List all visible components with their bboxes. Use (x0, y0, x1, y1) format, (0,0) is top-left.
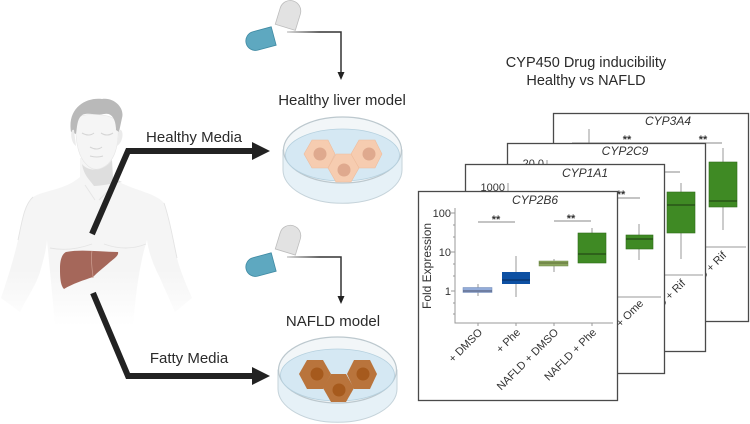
y tick labels (433, 208, 451, 298)
x tick labels: NAFLD + DMSO (495, 326, 561, 393)
axes (451, 208, 613, 326)
arrow: healthy media (92, 142, 270, 234)
box: NAFLD Phe (578, 228, 606, 263)
x tick labels: NAFLD + Phe (542, 327, 599, 383)
title: CYP2B6 (512, 193, 558, 207)
cell centre (328, 154, 359, 182)
x tick labels (447, 326, 599, 393)
cell right (351, 140, 382, 168)
petri dish: healthy (283, 117, 402, 203)
y axis label: Fold Expression (420, 223, 434, 309)
panel: CYP2B6 (418, 192, 618, 400)
significance brackets: ** (567, 213, 576, 225)
chart heading: Healthy vs NAFLD (526, 73, 646, 89)
hair (70, 99, 122, 134)
chart heading (506, 55, 667, 89)
plot: ** (699, 134, 708, 146)
cell left (304, 140, 335, 168)
heading: healthy liver model: Healthy liver model (278, 92, 406, 109)
petri dish: NAFLD (278, 337, 397, 422)
ears (71, 130, 123, 146)
y tick labels: 10 (439, 247, 451, 259)
box: NAFLD DMSO (539, 259, 568, 272)
facial features (82, 133, 113, 157)
panel: CYP1A1 (466, 164, 664, 374)
y tick labels: 100 (433, 208, 451, 220)
icon: liver (60, 251, 118, 289)
plot (523, 158, 703, 330)
plot: 20.0 (523, 158, 544, 170)
plot (572, 129, 746, 302)
human figure (1, 99, 192, 326)
plot: NAFLD + Ome (586, 298, 646, 357)
plot: 1000 (481, 182, 505, 194)
x tick labels: + DMSO (447, 326, 485, 365)
panel: CYP2C9 (508, 144, 706, 352)
box: DMSO (463, 284, 492, 296)
neck shadow (82, 160, 122, 186)
label: healthy media: Healthy Media (146, 129, 243, 146)
cell left (299, 360, 331, 389)
medium (286, 129, 400, 181)
icon: capsule NAFLD (244, 223, 303, 279)
label: fatty media: Fatty Media (150, 350, 229, 367)
significance brackets (478, 213, 591, 226)
plot: NAFLD + Rif (677, 249, 730, 302)
title: CYP3A4 (645, 114, 691, 128)
cell centre (323, 374, 354, 402)
chart heading: CYP450 Drug inducibility (506, 55, 667, 71)
arrow: drug to NAFLD model (287, 257, 344, 304)
box: Phe (502, 256, 530, 297)
plot: ** (617, 189, 626, 201)
medium (280, 349, 394, 401)
plot: NAFLD + Rif (636, 277, 689, 330)
chest lines (18, 185, 177, 258)
cell right (347, 360, 377, 389)
plot: ** (623, 134, 632, 146)
dish body (278, 370, 397, 422)
arrow: fatty media (93, 293, 270, 385)
title: CYP1A1 (562, 166, 608, 180)
icon: capsule healthy (244, 0, 303, 53)
face (76, 114, 118, 169)
panel: CYP3A4 (554, 114, 748, 322)
heading: NAFLD model: NAFLD model (286, 313, 380, 330)
title: CYP2C9 (602, 144, 649, 158)
plot (481, 182, 661, 357)
dish body (283, 150, 402, 203)
y tick labels: 1 (445, 286, 451, 298)
body (1, 177, 192, 326)
neck (80, 158, 112, 195)
x tick labels: + Phe (494, 327, 523, 356)
significance brackets: ** (492, 214, 501, 226)
arrow: drug to healthy model (287, 32, 344, 80)
